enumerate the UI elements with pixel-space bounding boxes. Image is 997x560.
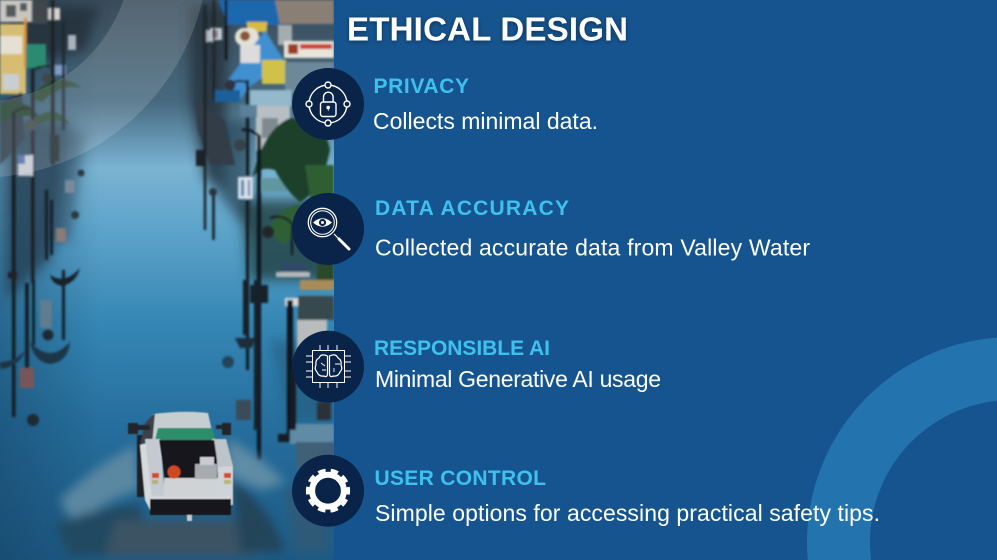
panel: flooded street photo [0,0,334,560]
text: user control description: Simple options for accessing practical safety tips. [375,500,880,526]
icon: brain on circuit chip [292,331,364,403]
heading: privacy: PRIVACY [374,75,469,98]
right buildings [195,0,334,192]
left palms and street poles [0,0,82,417]
heading: data accuracy: DATA ACCURACY [375,197,569,220]
text: data accuracy description: Collected accurate data from Valley Water [375,234,810,260]
icon: eye in magnifying glass [292,193,364,265]
item: privacy [292,68,598,140]
item: data accuracy [292,193,810,265]
decorative ring bottom right [807,338,997,560]
pickup truck [128,412,233,521]
title: ETHICAL DESIGN [347,10,628,48]
text: responsible ai description: Minimal Generative AI usage [375,366,661,392]
icon: padlock in network ring [292,68,364,140]
left reflections [0,170,84,426]
right reflections [209,188,331,430]
left buildings [0,0,76,165]
text: privacy description: Collects minimal data. [373,108,598,134]
item: responsible ai [292,331,661,403]
translucent ring overlay [0,0,202,177]
heading: responsible ai: RESPONSIBLE AI [374,337,550,360]
heading: user control: USER CONTROL [374,467,546,490]
right palms and poles [205,0,334,468]
spray and wake [55,438,328,556]
panel: blue content background [334,0,997,560]
icon: gear [292,455,364,527]
item: user control [292,455,880,527]
